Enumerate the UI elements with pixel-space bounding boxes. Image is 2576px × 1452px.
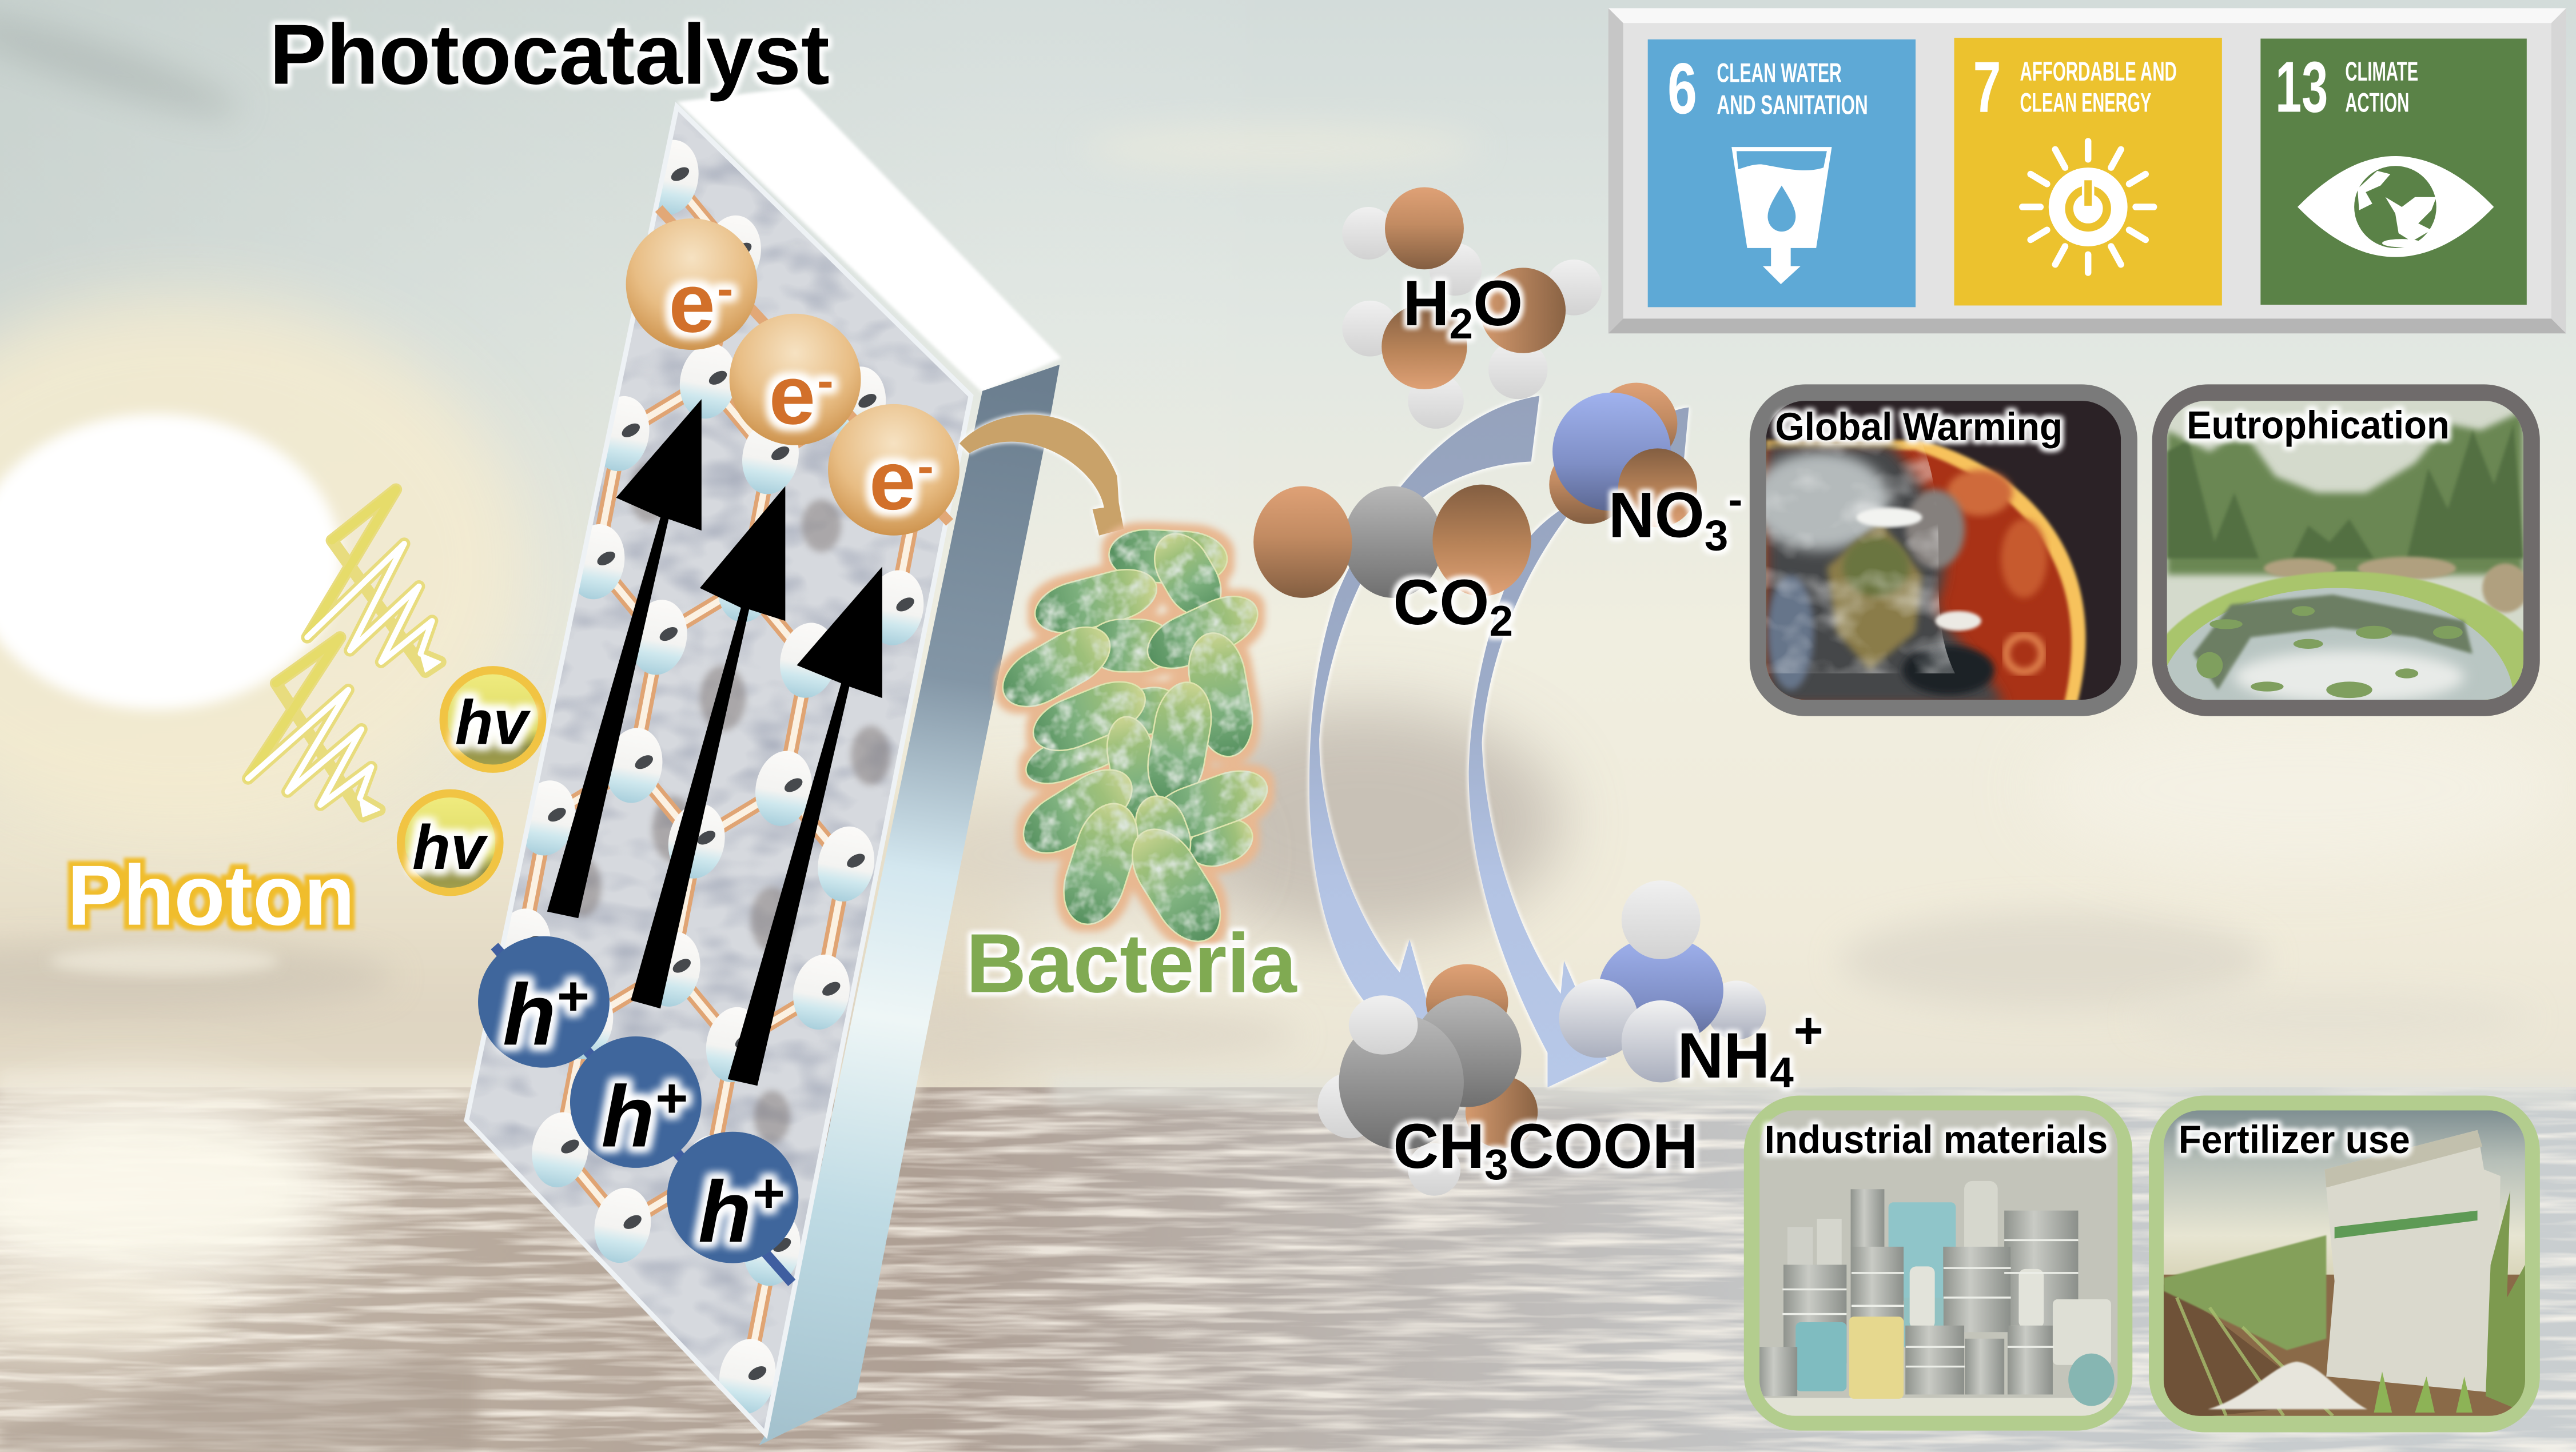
SDG 7 tile: 7 — [1973, 46, 2001, 127]
SDG 13 tile: 13 — [2275, 46, 2328, 127]
icon: eye with globe — [2298, 156, 2494, 257]
SDG 13 tile: CLIMATE — [2345, 57, 2418, 87]
electron 2: - — [817, 353, 834, 408]
label: Industrial materials: Industrial materials — [1765, 1118, 2108, 1162]
hole 3: + — [751, 1162, 784, 1224]
electron 2: e — [769, 348, 815, 442]
icon: water glass — [1731, 147, 1832, 284]
panel: Global Warming — [1750, 384, 2137, 716]
hv badge 2 — [401, 793, 499, 892]
label: NH4+: + — [1794, 1002, 1823, 1059]
electron 3 — [828, 404, 959, 536]
molecule: CO2 — [1253, 485, 1531, 645]
label: NO3-: NO — [1608, 480, 1705, 551]
label: CO2: CO — [1393, 567, 1489, 638]
label: Photon: Photon — [67, 848, 355, 943]
sun disc — [0, 414, 342, 709]
molecule: NO3- — [1549, 382, 1742, 560]
label: Eutrophication: Eutrophication — [2187, 403, 2450, 447]
hv badge 2: hv — [412, 813, 488, 883]
label: NH4+: NH — [1677, 1020, 1770, 1091]
molecule: CH3COOH — [1317, 964, 1698, 1196]
SDG 7 tile — [1954, 38, 2222, 305]
label: H2O: 2 — [1450, 300, 1473, 348]
molecule: NH4+ — [1559, 880, 1823, 1096]
hole 2: + — [655, 1067, 687, 1129]
hole 1: h — [503, 966, 556, 1063]
arrow: H2O to CH3COOH — [1309, 396, 1539, 1068]
label: H2O: O — [1473, 268, 1523, 339]
title: Photocatalyst: Photocatalyst — [269, 7, 830, 102]
holes — [478, 936, 798, 1263]
hv badges — [401, 670, 542, 892]
forest band — [2167, 410, 2523, 575]
hole 1: + — [556, 965, 588, 1027]
hv badge 1 — [444, 670, 542, 769]
label: Global Warming: Global Warming — [1775, 405, 2063, 449]
electron 1: - — [717, 261, 733, 316]
label: NH4+: 4 — [1770, 1048, 1794, 1096]
electron 1 — [626, 218, 757, 350]
electron 3: e — [869, 434, 915, 528]
electron 2 — [730, 314, 861, 445]
label: Bacteria: Bacteria — [966, 916, 1297, 1010]
photon squiggles — [248, 489, 440, 816]
black arrows — [547, 399, 882, 1086]
photocatalyst plate — [467, 87, 1061, 1446]
SDG 6 tile: 6 — [1667, 48, 1697, 129]
label: H2O: H — [1403, 268, 1450, 339]
arrow 1 — [547, 399, 702, 918]
label: CH3COOH: COOH — [1508, 1111, 1698, 1182]
label: CH3COOH: 3 — [1484, 1140, 1508, 1188]
hv badge 1: hv — [455, 688, 531, 758]
icon: sun with power symbol — [2022, 141, 2154, 273]
molecule: H2O — [1342, 188, 1602, 429]
SDG 7 tile: CLEAN ENERGY — [2020, 87, 2151, 118]
SDG 7 tile: AFFORDABLE AND — [2020, 57, 2177, 87]
SDG 6 tile: CLEAN WATER — [1717, 58, 1842, 89]
SDG 6 tile — [1648, 39, 1916, 307]
SDG 13 tile — [2260, 39, 2527, 305]
plate: lattice front face — [467, 107, 971, 1434]
arrow 2 — [631, 486, 785, 1008]
sun glow — [0, 296, 525, 837]
panel: Eutrophication — [2152, 384, 2540, 716]
label: NO3-: 3 — [1705, 512, 1728, 560]
panel: SDG goals — [1608, 8, 2566, 333]
electrons — [626, 218, 959, 536]
label: NO3-: - — [1728, 475, 1742, 523]
label: CH3COOH: CH — [1393, 1111, 1484, 1182]
squiggle 1 — [307, 489, 440, 672]
hole 2: h — [602, 1068, 655, 1166]
electron 3: - — [917, 439, 934, 494]
plate: right side panel — [759, 365, 1060, 1446]
label: Fertilizer use: Fertilizer use — [2179, 1118, 2410, 1162]
squiggle 2 — [248, 637, 380, 816]
arrow 3 — [728, 567, 882, 1086]
hole 1 — [478, 936, 610, 1068]
label: CO2: 2 — [1489, 597, 1513, 645]
SDG 6 tile: AND SANITATION — [1717, 90, 1868, 121]
hole 2 — [570, 1036, 702, 1168]
hole 3 — [667, 1132, 798, 1263]
bacteria cluster — [992, 523, 1275, 954]
electron-hole transport bar lines — [495, 209, 950, 1283]
arrow: NO3 to NH4 — [1469, 408, 1689, 1087]
electron 1: e — [668, 256, 715, 350]
panel: Industrial materials — [1744, 1095, 2132, 1431]
arrow: electron transfer to bacteria — [959, 414, 1124, 536]
plate: top bevel — [677, 87, 1061, 393]
SDG 13 tile: ACTION — [2345, 87, 2409, 118]
hole 3: h — [698, 1163, 751, 1260]
panel: Fertilizer use — [2149, 1095, 2540, 1433]
